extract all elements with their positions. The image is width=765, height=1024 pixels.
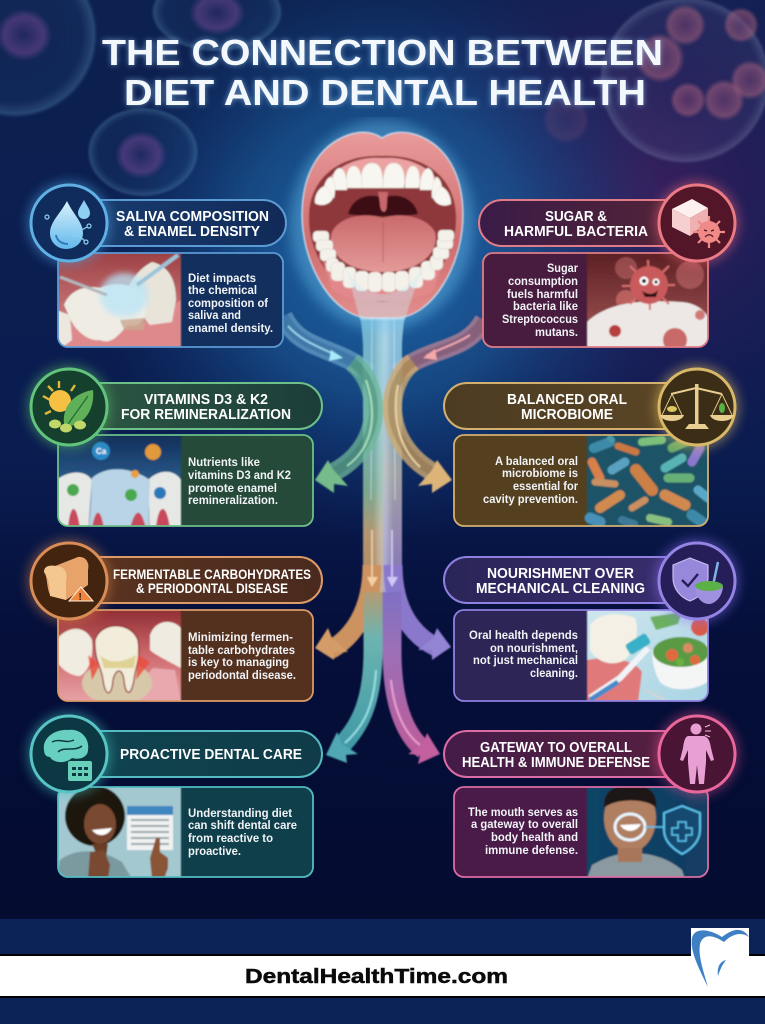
throat and uvula (348, 196, 418, 216)
lower teeth (313, 230, 454, 292)
lower gum (322, 258, 444, 301)
body text: cleaning. (530, 668, 578, 680)
header pill: SALIVA COMPOSITION (116, 209, 269, 225)
header pill: VITAMINS D3 & K2 (144, 392, 268, 408)
body card (454, 608, 710, 703)
body text: composition of (188, 298, 268, 310)
header pill: NOURISHMENT OVER (487, 566, 634, 582)
icon: bread and warning: ! (78, 592, 82, 603)
body text: saliva and (188, 310, 241, 322)
body text: on nourishment, (490, 643, 578, 655)
body text: table carbohydrates (188, 645, 295, 657)
panel: nourishment over mechanical cleaning (444, 540, 738, 703)
title: DIET AND DENTAL HEALTH (124, 72, 646, 113)
panel: sugar and harmful bacteria (479, 182, 738, 352)
central stem (357, 300, 408, 610)
body text: essential for (513, 481, 579, 493)
header pill (444, 731, 706, 777)
body text: immune defense. (485, 845, 578, 857)
pipe: saliva (283, 316, 370, 374)
body text: Streptococcus (502, 314, 578, 326)
body card (56, 433, 313, 528)
body text (188, 273, 273, 335)
body text: the chemical (188, 285, 257, 297)
header pill (60, 731, 322, 777)
footer band (0, 919, 765, 1024)
arrow: vitamins (315, 362, 374, 493)
body text: a gateway to overall (471, 819, 578, 831)
body text: fuels harmful (507, 289, 578, 301)
header pill: FERMENTABLE CARBOHYDRATES (113, 566, 311, 582)
upper teeth (315, 163, 451, 206)
body text: is key to managing (188, 657, 289, 669)
body text: consumption (508, 276, 578, 288)
header pill (60, 200, 286, 246)
header pill (444, 383, 706, 429)
title: THE CONNECTION BETWEEN (102, 32, 663, 73)
title (102, 32, 663, 113)
body card (454, 433, 710, 528)
panel: proactive dental care (28, 713, 322, 879)
icon: brain and calendar (28, 713, 110, 795)
header pill: MICROBIOME (521, 407, 613, 423)
image: toothbrush tooth and salad (587, 608, 710, 703)
body text: bacteria like (513, 301, 578, 313)
website name: DentalHealthTime.com (245, 965, 508, 988)
body text (483, 456, 579, 506)
arrow: nourishment (387, 530, 451, 660)
body card (56, 785, 313, 879)
body text: enamel density. (188, 323, 273, 335)
image: smiling woman with calendar (56, 785, 181, 879)
body text (468, 807, 578, 857)
pipes: flow from mouth to topics (283, 300, 484, 764)
body text: microbiome is (502, 468, 578, 480)
body card (454, 784, 710, 879)
body card (56, 251, 283, 349)
icon: human figure (656, 713, 738, 795)
body card (56, 608, 313, 705)
header pill (444, 557, 706, 603)
panel: saliva composition (28, 182, 286, 349)
icon: balance scale (656, 366, 738, 448)
header pill (60, 383, 322, 429)
body text (469, 630, 578, 680)
arrow: proactive care (326, 592, 376, 763)
tongue (331, 215, 436, 272)
header pill: PROACTIVE DENTAL CARE (120, 747, 302, 763)
body text: proactive. (188, 846, 241, 858)
body text: not just mechanical (473, 655, 578, 667)
pipe: sugar (396, 320, 484, 374)
arrow: microbiome (392, 362, 452, 493)
body text: promote enamel (188, 483, 277, 495)
body text (188, 808, 297, 858)
body text: Sugar (547, 263, 578, 275)
body text (188, 632, 296, 682)
header pill: & ENAMEL DENSITY (124, 224, 260, 240)
body text: remineralization. (188, 495, 278, 507)
body text: mutans. (535, 327, 578, 339)
header pill (60, 557, 322, 603)
panel: fermentable carbohydrates (28, 540, 322, 705)
body card (483, 251, 710, 352)
body text: periodontal disease. (188, 670, 296, 682)
header pill: SUGAR & (545, 209, 607, 225)
icon: sun leaf and capsules (28, 366, 110, 448)
header pill: FOR REMINERALIZATION (121, 407, 291, 423)
body text (502, 263, 578, 339)
body text (188, 457, 291, 507)
body text: vitamins D3 and K2 (188, 470, 291, 482)
header pill: GATEWAY TO OVERALL (480, 740, 632, 756)
body text: body health and (491, 832, 578, 844)
body text: Oral health depends (469, 630, 578, 642)
arrow: carbohydrates (315, 530, 378, 660)
body text: Understanding diet (188, 808, 292, 820)
panel: vitamins D3 and K2 (28, 366, 322, 528)
image: enamel treatment (56, 251, 181, 349)
body text: can shift dental care (188, 820, 297, 832)
body text: Minimizing fermen- (188, 632, 293, 644)
panel: gateway to overall health (444, 713, 738, 879)
header pill: HARMFUL BACTERIA (504, 224, 648, 240)
body text: cavity prevention. (483, 494, 578, 506)
body text: A balanced oral (495, 456, 578, 468)
title: THE CONNECTION BETWEEN (102, 32, 663, 73)
mouth illustration (290, 120, 474, 330)
arrow: gateway (391, 592, 440, 764)
header pill: HEALTH & IMMUNE DEFENSE (462, 755, 650, 771)
upper gum (320, 158, 446, 195)
image: microbiome capsules (587, 433, 710, 528)
icon: shield toothbrush and bowl (656, 540, 738, 622)
image: remineralization: Ca (96, 447, 107, 456)
lips (302, 132, 463, 318)
header pill: & PERIODONTAL DISEASE (136, 580, 288, 596)
icon: tooth logo (691, 928, 749, 987)
image: bacteria on sugar (587, 251, 710, 352)
header pill (479, 200, 705, 246)
panel: balanced oral microbiome (444, 366, 738, 528)
image: smiling man with shield (587, 784, 710, 879)
body text: from reactive to (188, 833, 273, 845)
body text: Diet impacts (188, 273, 256, 285)
header pill: MECHANICAL CLEANING (476, 581, 645, 597)
body text: Nutrients like (188, 457, 260, 469)
body text: The mouth serves as (468, 807, 578, 819)
image: periodontal tooth (56, 608, 181, 705)
icon: bread and warning (28, 540, 110, 622)
mouth interior (309, 156, 456, 302)
saliva stream start (346, 268, 422, 320)
header pill: BALANCED ORAL (507, 392, 627, 408)
icon: sugar cube and bacterium (656, 182, 738, 264)
title: DIET AND DENTAL HEALTH (124, 72, 646, 113)
icon: water drops (28, 182, 110, 264)
